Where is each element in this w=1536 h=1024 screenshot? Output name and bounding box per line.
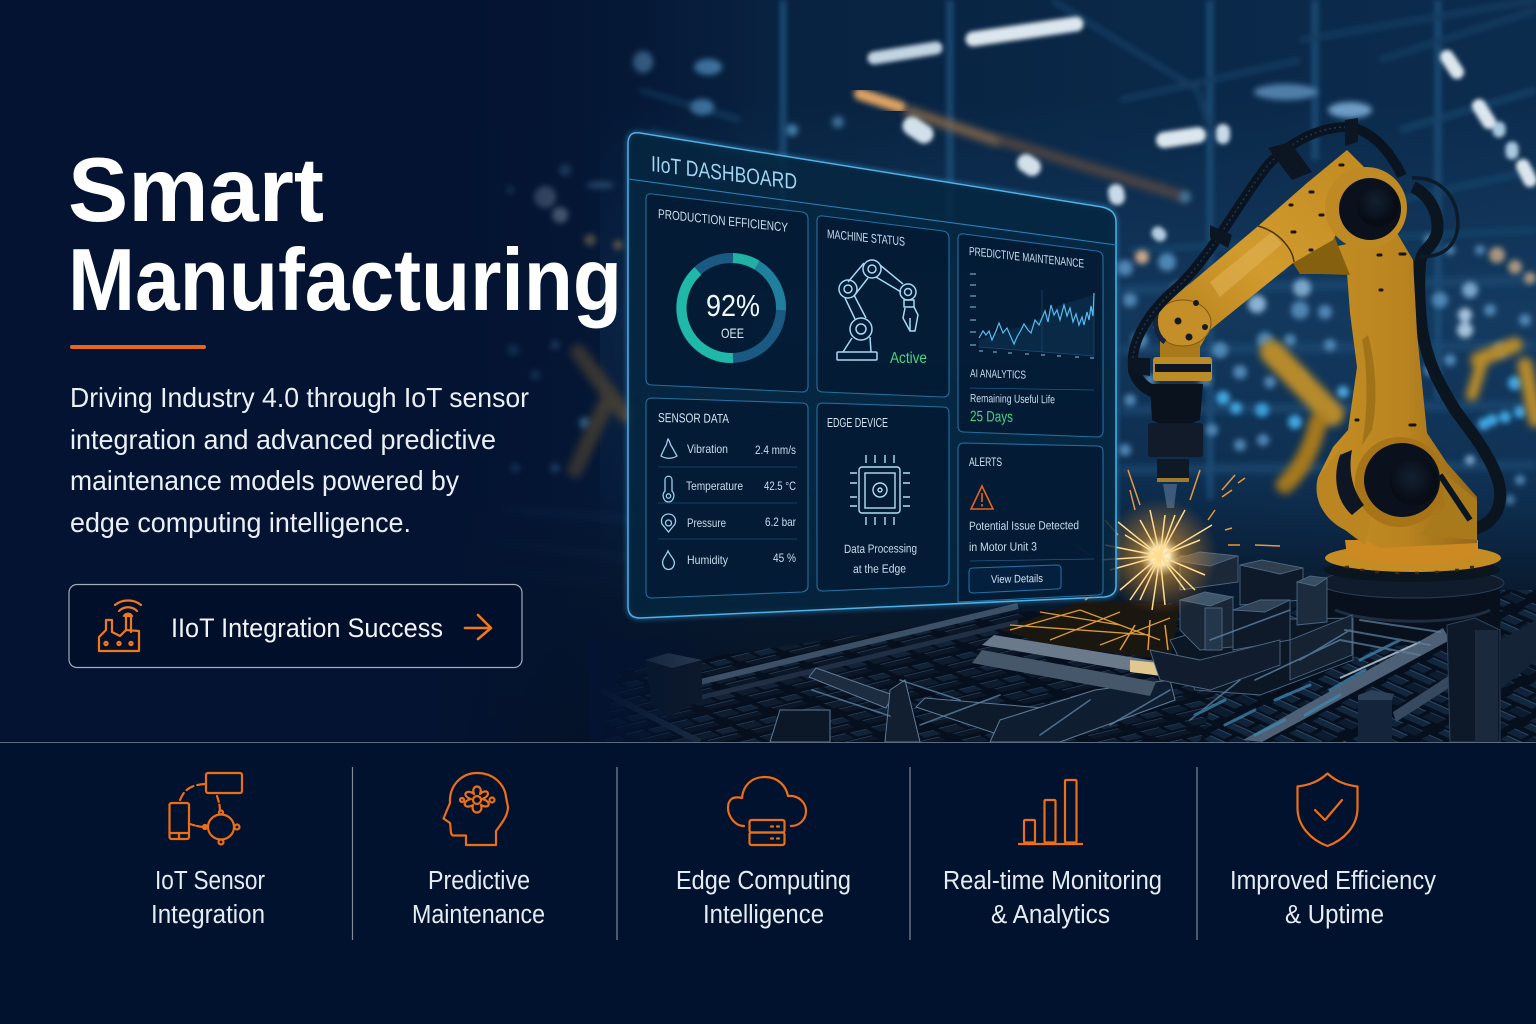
panel: machine status	[817, 216, 949, 397]
panel glow	[628, 133, 1116, 618]
feature: real-time monitoring: Real-time Monitoring	[943, 867, 1162, 895]
arm joint seam	[1258, 226, 1294, 262]
panel header divider	[628, 179, 1116, 245]
roller bars	[770, 668, 1175, 742]
description text: maintenance models powered by	[70, 465, 459, 496]
panel: predictive maintenance	[958, 234, 1103, 437]
panel: sensor data: 45 %	[773, 551, 796, 565]
panel: alerts: ALERTS	[969, 455, 1002, 469]
feature: predictive maintenance: Predictive	[428, 867, 530, 895]
arm highlight	[1210, 232, 1282, 297]
feature: IoT sensor integration: IoT Sensor	[155, 867, 265, 895]
panel: alerts	[958, 443, 1103, 602]
robot pedestal rings	[1320, 558, 1504, 650]
cable clamps	[1128, 118, 1358, 376]
panel: production efficiency: 92%	[706, 288, 760, 323]
icon: warning triangle	[971, 486, 993, 509]
panel: sensor data: 6.2 bar	[765, 515, 796, 529]
robot column	[1318, 233, 1477, 548]
panel: machine status: Active	[890, 350, 927, 367]
description text	[70, 382, 529, 538]
view details button	[969, 565, 1061, 593]
glass panel	[628, 133, 1116, 618]
icon: robot arm	[837, 260, 918, 360]
top joint motor	[1325, 167, 1407, 249]
cable loop	[1412, 178, 1458, 256]
arrow	[465, 615, 491, 639]
panel: production efficiency: OEE	[721, 325, 744, 341]
panel: production efficiency	[646, 194, 808, 392]
panel: edge device	[817, 403, 949, 591]
panel: sensor data: Temperature	[686, 479, 743, 493]
feature: real-time monitoring	[943, 780, 1162, 929]
feature: edge computing intelligence: Intelligence	[703, 901, 824, 929]
callout button	[69, 584, 522, 668]
panel: sensor data: SENSOR DATA	[658, 410, 729, 426]
panel: alerts: Potential Issue Detected	[969, 518, 1079, 533]
icon: edge chip	[850, 455, 910, 525]
feature: edge computing intelligence: Edge Computing	[676, 867, 851, 895]
OEE gauge ring	[681, 258, 781, 358]
panel: edge device: Data Processing	[844, 541, 917, 556]
panel: predictive maintenance: Remaining Useful Life	[970, 393, 1055, 406]
description text: Driving Industry 4.0 through IoT sensor	[70, 382, 529, 413]
feature: predictive maintenance	[412, 773, 545, 929]
textured machine base	[600, 600, 1300, 742]
icon: smart factory	[99, 600, 141, 651]
feature: improved efficiency: & Uptime	[1285, 901, 1384, 929]
feature: improved efficiency: Improved Efficiency	[1230, 867, 1436, 895]
title accent rule	[70, 345, 206, 349]
panel: sensor data: 2.4 mm/s	[755, 443, 796, 457]
panel: predictive maintenance: AI ANALYTICS	[970, 368, 1026, 382]
left conveyor rails	[600, 606, 1018, 742]
panel: sensor data: Humidity	[687, 553, 728, 567]
feature: edge computing intelligence	[676, 777, 851, 929]
panel: sensor data: Pressure	[687, 516, 726, 530]
sensor row icons	[661, 439, 677, 570]
factory floor shadow	[440, 480, 1536, 742]
panel: machine status: MACHINE STATUS	[827, 227, 905, 249]
elbow underside	[1293, 233, 1350, 275]
dim distant lights	[505, 51, 1372, 473]
industrial robot arm	[1128, 118, 1501, 573]
icon: head with flower	[444, 773, 508, 845]
panel: sensor data: 42.5 °C	[764, 479, 796, 493]
feature: IoT sensor integration	[151, 773, 265, 929]
central plate	[972, 600, 1180, 696]
welding tool head	[1148, 357, 1212, 508]
icon: connected sensors	[170, 773, 242, 844]
wrist disc	[1155, 300, 1211, 358]
title: Smart	[68, 140, 324, 241]
title	[68, 140, 622, 329]
left machinery fade	[590, 640, 720, 742]
distant robot arms	[1272, 345, 1536, 485]
description text: integration and advanced predictive	[70, 424, 496, 455]
machine highlights	[812, 610, 1440, 735]
bokeh factory lights	[1117, 234, 1536, 505]
icon: shield check	[1298, 774, 1358, 846]
welding sparks	[1075, 470, 1280, 650]
icon: cloud server	[728, 777, 806, 845]
panel: predictive maintenance: 25 Days	[970, 408, 1013, 426]
faint far-left robot	[575, 352, 625, 470]
feature: real-time monitoring: & Analytics	[991, 901, 1110, 929]
ceiling lights	[874, 24, 1530, 235]
machinery bed	[590, 552, 1536, 742]
machined post	[645, 653, 702, 717]
panel: production efficiency: PRODUCTION EFFICIENCY	[658, 206, 788, 235]
icon: bar chart	[1018, 780, 1083, 844]
factory background	[0, 0, 1536, 742]
panel: alerts: in Motor Unit 3	[969, 539, 1037, 554]
title: Manufacturing	[68, 230, 622, 329]
feature: IoT sensor integration: Integration	[151, 901, 265, 929]
callout button: IIoT Integration Success	[171, 613, 443, 643]
panel: sensor data: Vibration	[687, 442, 728, 456]
rear cable	[1407, 187, 1500, 540]
arm speckles	[1290, 165, 1415, 425]
dashboard title: IIoT DASHBOARD	[651, 151, 797, 194]
column fold shading	[1362, 335, 1375, 445]
bottom feature band	[0, 742, 1536, 1024]
machine blocks cluster	[1150, 552, 1353, 695]
panel: edge device: EDGE DEVICE	[827, 416, 888, 430]
feature: predictive maintenance: Maintenance	[412, 901, 545, 929]
panel: edge device: at the Edge	[853, 561, 906, 576]
orange ceiling beam	[860, 94, 1186, 197]
base flange	[1325, 540, 1501, 573]
line chart	[970, 274, 1094, 358]
panel: sensor data	[646, 398, 808, 598]
upper arm	[1153, 150, 1367, 347]
dashboard panel	[628, 133, 1116, 618]
background structure beams	[640, 0, 1536, 500]
left darkening overlay	[0, 0, 760, 742]
description text: edge computing intelligence.	[70, 507, 411, 538]
feature: improved efficiency	[1230, 774, 1436, 929]
right rail and columns	[1243, 618, 1536, 742]
bottom joint motor	[1317, 437, 1477, 545]
front cable	[1133, 127, 1402, 395]
view details button: View Details	[991, 573, 1043, 586]
panel: predictive maintenance: PREDICTIVE MAINTENANCE	[969, 244, 1084, 271]
